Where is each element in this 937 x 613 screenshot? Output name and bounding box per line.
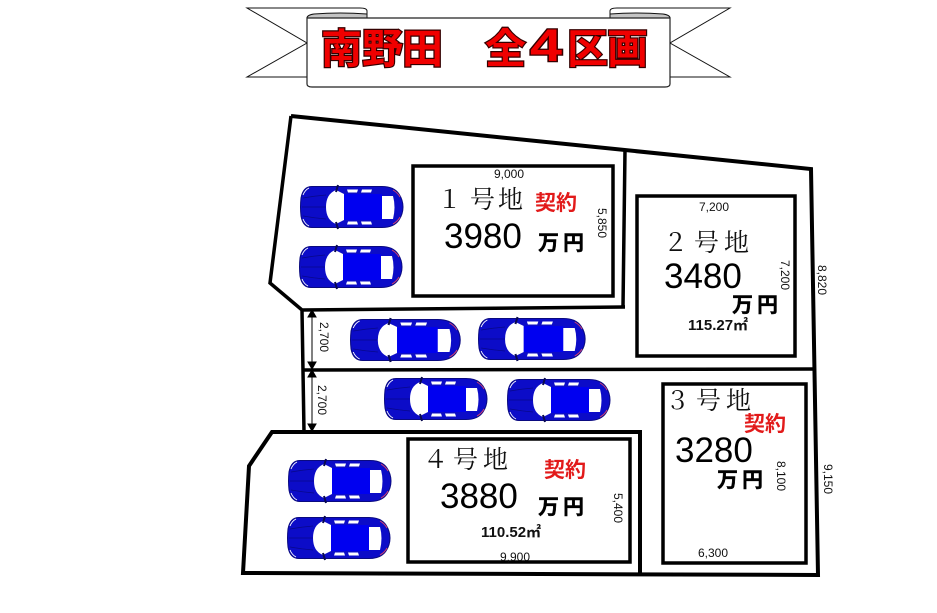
banner right scroll fold: [610, 13, 670, 18]
title text: 南野田: [321, 26, 443, 72]
lower road width label: 2,700: [315, 385, 329, 415]
upper road width label: 2,700: [317, 322, 331, 352]
lot 3 outline: [663, 384, 806, 563]
lot 3 depth dimension: 8,100: [774, 461, 788, 491]
parked cars: [288, 185, 610, 560]
lot 2 width dimension: 7,200: [699, 200, 729, 214]
lot 1 name: １号地: [437, 180, 526, 216]
lot 2 price: 3480: [664, 257, 742, 296]
banner left scroll fold: [307, 13, 367, 18]
lot 4 price unit: 万円: [538, 496, 588, 519]
title text: 全: [485, 26, 526, 72]
lot 1 width dimension: 9,000: [494, 167, 524, 181]
banner left tail: [247, 8, 367, 77]
lot 3 price unit: 万円: [717, 469, 767, 492]
lot 3 boundary dimension: 9,150: [821, 464, 835, 494]
lot 2 depth dimension: 7,200: [778, 260, 792, 290]
lot 3 width dimension: 6,300: [698, 546, 728, 560]
lot 1 contract status: 契約: [535, 192, 577, 215]
lot 4: [408, 439, 630, 564]
lot 4 width dimension: 9,900: [500, 550, 530, 564]
lot 2 name: ２号地: [663, 223, 752, 259]
lot 2 outline: [637, 196, 795, 356]
lot 1: [413, 166, 613, 296]
lower road arrow: [308, 370, 316, 431]
title banner: [247, 8, 730, 87]
car: lot 4 lower: [288, 516, 390, 560]
car: road row 2 left: [384, 377, 487, 421]
lot 3: [663, 381, 835, 563]
site plan boundary lines: [243, 116, 818, 575]
lot 1 price: 3980: [444, 217, 522, 256]
car: road row 2 right: [508, 378, 610, 422]
road dimension arrows: [308, 310, 331, 431]
lot 4 price: 3880: [440, 477, 518, 516]
upper road arrow: [308, 310, 316, 369]
title text: 区画: [567, 26, 648, 72]
lot 4 contract status: 契約: [544, 459, 586, 482]
lot 4 name: ４号地: [423, 440, 511, 476]
lot 2 boundary dimension: 8,820: [815, 265, 829, 295]
car: road row 1 left: [351, 318, 460, 362]
car: lot 1 lower: [300, 245, 402, 289]
car: road row 1 right: [479, 317, 585, 361]
lot 2 price unit: 万円: [732, 294, 782, 317]
lot 1 depth dimension: 5,850: [595, 208, 609, 238]
lot 4 outline: [408, 439, 630, 562]
lot 1 price unit: 万円: [538, 232, 588, 255]
lot 3 name: ３号地: [665, 381, 754, 417]
title text: 4: [530, 20, 562, 71]
car: lot 4 upper: [288, 459, 391, 503]
lot 3 price: 3280: [675, 431, 753, 470]
lot 3 contract status: 契約: [744, 413, 786, 436]
lot 2: [637, 196, 829, 356]
lot 1 outline: [413, 166, 613, 296]
lot 2 area: 115.27㎡: [688, 316, 748, 334]
banner right tail: [610, 8, 730, 77]
lot 4 area: 110.52㎡: [481, 523, 541, 541]
banner main panel: [307, 18, 670, 87]
car: lot 1 upper: [300, 185, 403, 229]
title text: [321, 20, 648, 72]
lot 4 depth dimension: 5,400: [611, 493, 625, 523]
